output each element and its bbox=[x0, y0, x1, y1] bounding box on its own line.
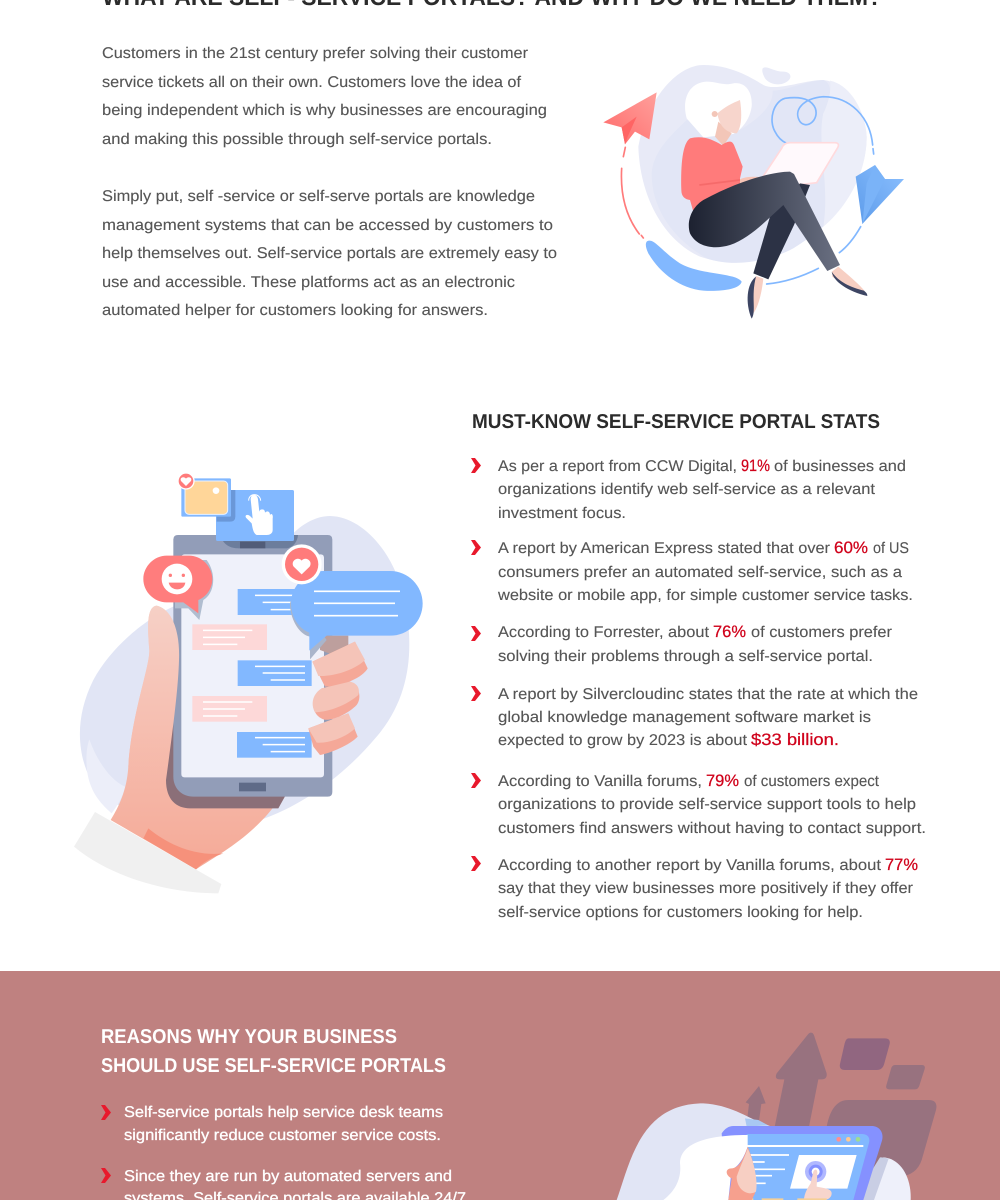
stat 4: A report by Silvercloudinc states that the rate at which the bbox=[498, 686, 918, 703]
stat 6: say that they view businesses more positively if they offer bbox=[498, 880, 913, 897]
list: reasons: Self-service portals help service desk teams bbox=[124, 1104, 443, 1121]
text block: intro paragraphs: management systems that can be accessed by customers to bbox=[102, 217, 553, 234]
stat 1: organizations identify web self-service as a relevant bbox=[498, 481, 876, 498]
stat 3: of customers prefer bbox=[751, 624, 892, 641]
stat 5 bbox=[471, 772, 926, 837]
text block: intro paragraphs: Customers in the 21st century prefer solving their customer bbox=[102, 45, 528, 62]
stat 5: organizations to provide self-service support tools to help bbox=[498, 796, 916, 813]
stat 2: website or mobile app, for simple customer service tasks. bbox=[497, 587, 913, 604]
stat 1 bbox=[471, 457, 906, 522]
text block: intro paragraphs: Simply put, self -service or self-serve portals are knowledge bbox=[102, 188, 535, 205]
text block: intro paragraphs: automated helper for customers looking for answers. bbox=[102, 302, 488, 319]
stat 2: A report by American Express stated that over bbox=[498, 540, 830, 557]
text block: intro paragraphs bbox=[102, 45, 557, 319]
stat 3: solving their problems through a self-service portal. bbox=[498, 648, 873, 665]
text block: intro paragraphs: service tickets all on their own. Customers love the idea of bbox=[102, 74, 522, 91]
list: stats bbox=[471, 457, 926, 921]
illustration: woman with laptop between paper planes bbox=[603, 65, 904, 319]
heading: stats: MUST-KNOW SELF-SERVICE PORTAL STATS bbox=[472, 411, 880, 433]
stat 3: 76% bbox=[713, 623, 746, 641]
text block: intro paragraphs: being independent which is why businesses are encouraging bbox=[102, 102, 547, 119]
text block: intro paragraphs: and making this possible through self-service portals. bbox=[102, 131, 492, 148]
stat 1: of businesses and bbox=[774, 458, 906, 475]
stat 5: According to Vanilla forums, bbox=[498, 773, 702, 790]
list: reasons: significantly reduce customer service costs. bbox=[124, 1127, 441, 1144]
stat 6: According to another report by Vanilla forums, about bbox=[498, 857, 882, 874]
illustration: hand holding phone with chat bubbles bbox=[74, 473, 423, 893]
stat 4: expected to grow by 2023 is about bbox=[498, 732, 748, 749]
stat 4: $33 billion. bbox=[751, 731, 839, 749]
stat 5: customers find answers without having to contact support. bbox=[498, 820, 926, 837]
stat 6 bbox=[471, 856, 918, 921]
heading: reasons bbox=[101, 1026, 446, 1077]
stat 6: self-service options for customers looking for help. bbox=[498, 904, 863, 921]
text block: intro paragraphs: use and accessible. These platforms act as an electronic bbox=[102, 274, 515, 291]
text block: intro paragraphs: help themselves out. Self-service portals are extremely easy to bbox=[102, 245, 557, 262]
stat 2: 60% bbox=[834, 539, 868, 557]
list: reasons: Since they are run by automated servers and bbox=[124, 1168, 452, 1185]
stat 2: consumers prefer an automated self-service, such as a bbox=[498, 564, 902, 581]
stat 1: As per a report from CCW Digital, bbox=[498, 458, 737, 475]
stat 5: 79% bbox=[706, 772, 739, 790]
stat 6: 77% bbox=[885, 856, 918, 874]
stat 5: of customers expect bbox=[744, 773, 880, 790]
heading: reasons: SHOULD USE SELF-SERVICE PORTALS bbox=[101, 1055, 446, 1077]
stat 4 bbox=[471, 686, 918, 749]
heading: reasons: REASONS WHY YOUR BUSINESS bbox=[101, 1026, 397, 1048]
illustration: woman using tablet with rising arrows bbox=[617, 1033, 936, 1200]
stat 1: investment focus. bbox=[498, 505, 626, 522]
stat 2 bbox=[471, 539, 913, 604]
stat 1: 91% bbox=[741, 457, 770, 475]
stat 3 bbox=[471, 623, 892, 665]
list: reasons bbox=[101, 1104, 466, 1200]
stat 3: According to Forrester, about bbox=[498, 624, 710, 641]
stat 4: global knowledge management software market is bbox=[498, 709, 871, 726]
stat 2: of US bbox=[873, 540, 909, 557]
panel: reasons bbox=[0, 971, 1000, 1200]
